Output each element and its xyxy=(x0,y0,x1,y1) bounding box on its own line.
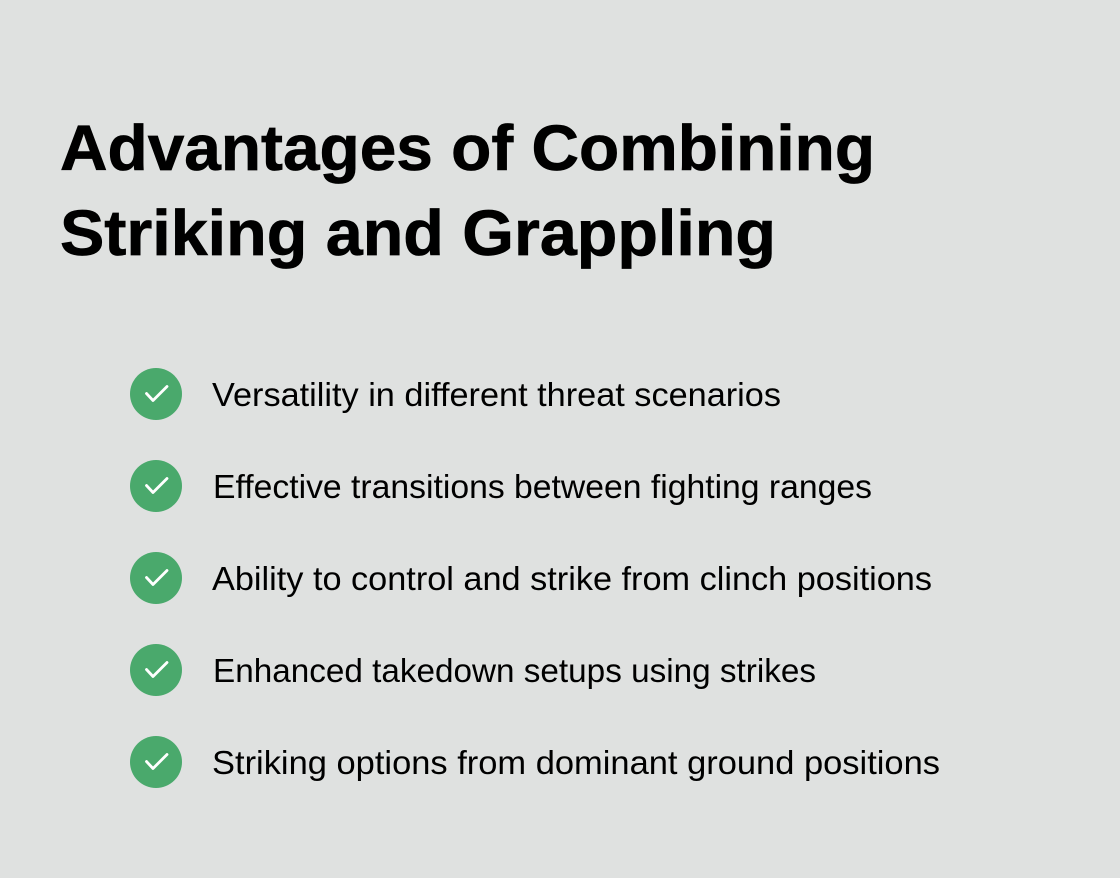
title: Striking and Grappling xyxy=(60,197,776,269)
checklist xyxy=(130,368,940,788)
item: ground: Striking options from dominant ground positions xyxy=(212,745,940,782)
item: versatility: Versatility in different threat scenarios xyxy=(212,377,781,414)
item: clinch: Ability to control and strike from clinch positions xyxy=(212,561,932,598)
item: ground xyxy=(130,736,940,788)
item: takedown: Enhanced takedown setups using strikes xyxy=(213,653,816,690)
item: transitions: Effective transitions between fighting ranges xyxy=(213,469,872,506)
title xyxy=(60,112,875,269)
item: takedown xyxy=(130,644,816,696)
item: transitions xyxy=(130,460,872,512)
item: versatility xyxy=(130,368,781,420)
title: Advantages of Combining xyxy=(60,112,875,184)
item: clinch xyxy=(130,552,932,604)
